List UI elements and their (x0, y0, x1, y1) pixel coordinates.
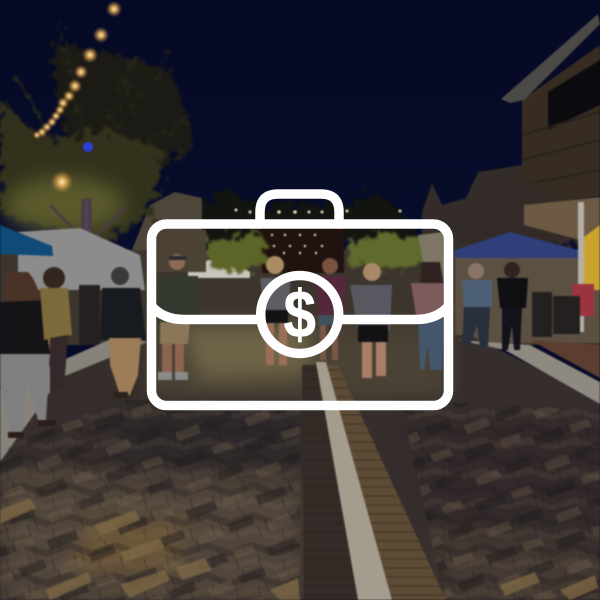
person: woman tan jacket (40, 267, 72, 392)
herringbone brick texture (0, 400, 600, 600)
left cream building (120, 192, 202, 280)
left tree foliage (0, 100, 165, 250)
person: man cap and polo (158, 254, 200, 380)
person: woman floral top (411, 262, 444, 370)
soldier course left of stripe (302, 365, 358, 600)
person: man centre (316, 258, 346, 360)
blue light in tree (83, 142, 93, 152)
soldier course right of stripe: lines (326, 365, 446, 600)
person: woman dark top and tan trousers (100, 267, 146, 398)
flap right (343, 306, 448, 320)
lit pavement under bag (150, 325, 450, 400)
dollar sign: $ (284, 277, 316, 352)
person: woman black outfit right (497, 262, 528, 350)
red stall table (572, 284, 594, 316)
briefcase body (152, 224, 448, 406)
timber building on right (501, 14, 600, 206)
dark bollard bins (79, 285, 580, 345)
ground base (0, 335, 600, 600)
person: woman grey tank top (350, 263, 392, 378)
mid-distance buildings (422, 165, 522, 260)
building wall inside bag left (156, 230, 206, 272)
left tree lower glow (5, 177, 125, 233)
festoon lights (234, 208, 402, 254)
blue tent left (0, 225, 53, 256)
stall awning (524, 197, 600, 240)
flap left (152, 306, 257, 320)
night sky (0, 0, 600, 300)
cream wall inside bag right (418, 232, 444, 300)
ground colour blotches (0, 410, 600, 600)
briefcase handle (260, 194, 339, 224)
market mid-ground background (0, 250, 600, 345)
right bare tree (470, 180, 580, 260)
left tree trunk (50, 200, 125, 290)
right sidewalk (458, 340, 600, 404)
left tree upper canopy (50, 40, 195, 170)
soldier course right of stripe (326, 365, 446, 600)
blue tent right with white highlights (455, 232, 578, 260)
person: man blue shirt (462, 263, 492, 348)
left sidewalk (0, 335, 148, 462)
person: woman black top far left (0, 272, 58, 438)
pale pavement patch under bag (180, 325, 310, 380)
yellow lit stall (580, 205, 600, 290)
distant tree tops (195, 185, 420, 240)
lit trees centre-left (205, 232, 268, 272)
lit trees centre-right (345, 232, 428, 270)
left tree branches (5, 20, 200, 190)
white post (578, 202, 584, 332)
clasp circle (261, 276, 339, 354)
stalls right (455, 258, 600, 343)
string of lights (33, 1, 122, 139)
white market tents left (18, 228, 145, 290)
centre pavement stripe (316, 362, 392, 600)
right brick terrace (530, 340, 600, 378)
white lamp glow (51, 171, 73, 193)
tan bricks (0, 498, 598, 600)
central dark building (262, 228, 344, 273)
small white tent centre-left (188, 260, 250, 278)
icon: briefcase with dollar sign (152, 194, 448, 406)
soldier course left of stripe: lines (302, 365, 358, 600)
person: woman centre-left (260, 256, 290, 365)
irregular brick texture (0, 400, 600, 600)
